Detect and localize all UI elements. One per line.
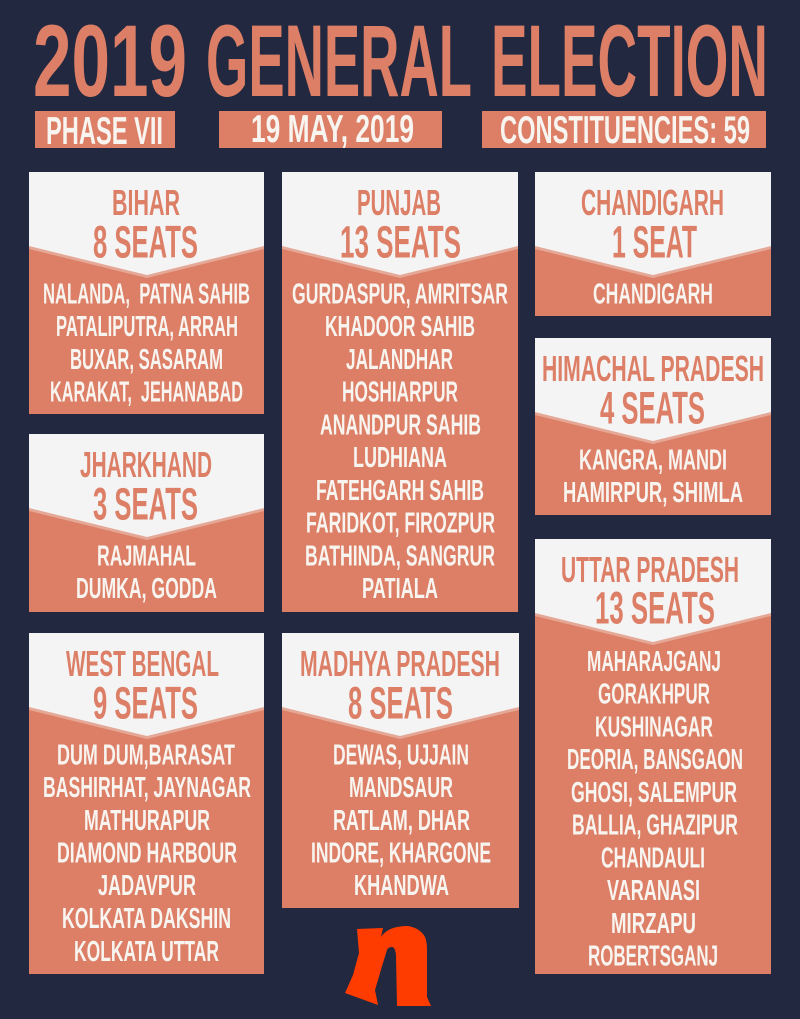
constituency list: West Bengal: MATHURAPUR [84,805,210,837]
constituency list: Punjab: HOSHIARPUR [342,376,458,408]
constituency list: Uttar Pradesh: MIRZAPU [611,908,696,940]
constituency list: Bihar: NALANDA, PATNA SAHIB [43,278,250,310]
constituency list: Jharkhand [76,540,217,605]
seat count: Uttar Pradesh: 13 SEATS [595,582,715,634]
constituency list: Punjab [292,278,508,605]
panel: Uttar Pradesh [535,539,771,974]
constituency list: West Bengal: DIAMOND HARBOUR [57,838,237,870]
constituency list: Punjab: FATEHGARH SAHIB [316,475,484,507]
constituency list: Jharkhand: RAJMAHAL [97,540,196,572]
constituency list: Punjab: GURDASPUR, AMRITSAR [292,278,508,310]
constituency list: Madhya Pradesh: INDORE, KHARGONE [311,838,491,870]
constituency list: Uttar Pradesh: CHANDAULI [601,842,705,874]
constituency list: West Bengal: JADAVPUR [98,870,196,902]
constituency list: Madhya Pradesh: RATLAM, DHAR [333,805,470,837]
panel: West Bengal [29,633,264,974]
title [33,4,768,118]
constituency list: Madhya Pradesh: MANDSAUR [349,772,453,804]
heading: Madhya Pradesh: MADHYA PRADESH [300,643,500,684]
constituency list: Madhya Pradesh: KHANDWA [354,870,449,902]
seat count: Jharkhand: 3 SEATS [93,478,198,530]
constituency list: Bihar: PATALIPUTRA, ARRAH [56,311,238,343]
constituency list: West Bengal: KOLKATA DAKSHIN [62,903,231,935]
panel: Himachal Pradesh [535,338,771,515]
constituency list: West Bengal: KOLKATA UTTAR [74,936,219,968]
constituency list: Bihar: BUXAR, SASARAM [70,344,223,376]
constituency list: Punjab: FARIDKOT, FIROZPUR [306,508,495,540]
constituency list: Punjab: BATHINDA, SANGRUR [305,540,495,572]
constituency list: Bihar [43,278,250,408]
constituency list: Punjab: ANANDPUR SAHIB [320,410,481,442]
panel: Bihar [29,172,264,414]
constituency list: Uttar Pradesh: GORAKHPUR [598,678,710,710]
constituency list: Madhya Pradesh: DEWAS, UJJAIN [333,740,469,772]
heading: Jharkhand: JHARKHAND [80,444,212,485]
panel: Jharkhand [29,434,264,612]
seat count: Himachal Pradesh: 4 SEATS [600,382,705,434]
constituency list: Bihar: KARAKAT, JEHANABAD [50,376,243,408]
panel: Chandigarh [535,172,771,316]
badge: phase [35,110,175,153]
seat count: Chandigarh: 1 SEAT [612,216,697,268]
constituency list: Madhya Pradesh [311,740,491,902]
heading: Bihar: BIHAR [112,182,180,223]
badge: phase: PHASE VII [46,110,163,153]
icon: n logo [345,926,431,1006]
constituency list: Uttar Pradesh: VARANASI [607,875,700,907]
constituency list: Punjab: LUDHIANA [353,442,447,474]
constituency list: Jharkhand: DUMKA, GODDA [76,573,217,605]
badge: date [219,108,442,151]
constituency list: Uttar Pradesh: KUSHINAGAR [595,712,713,744]
constituency list: West Bengal [43,740,251,968]
constituency list: Punjab: KHADOOR SAHIB [325,311,475,343]
title: GENERAL [206,4,472,118]
panel: Madhya Pradesh [282,633,519,908]
seat count: Punjab: 13 SEATS [340,216,461,268]
seat count: Madhya Pradesh: 8 SEATS [348,678,453,728]
panel: Punjab [282,172,518,612]
constituency list: Uttar Pradesh [567,646,743,972]
badge: date: 19 MAY, 2019 [251,108,414,151]
title: 2019 [33,4,187,118]
constituency list: Punjab: PATIALA [362,573,438,605]
seat count: Bihar: 8 SEATS [93,216,198,268]
heading: West Bengal: WEST BENGAL [66,643,219,684]
constituency list: Chandigarh: CHANDIGARH [593,278,713,310]
constituency list: Punjab: JALANDHAR [346,344,453,376]
constituency list: Himachal Pradesh [563,444,743,509]
constituency list: West Bengal: DUM DUM,BARASAT [57,740,235,772]
heading: Punjab: PUNJAB [357,182,441,223]
seat count: West Bengal: 9 SEATS [93,678,198,728]
constituency list: West Bengal: BASHIRHAT, JAYNAGAR [43,772,251,804]
